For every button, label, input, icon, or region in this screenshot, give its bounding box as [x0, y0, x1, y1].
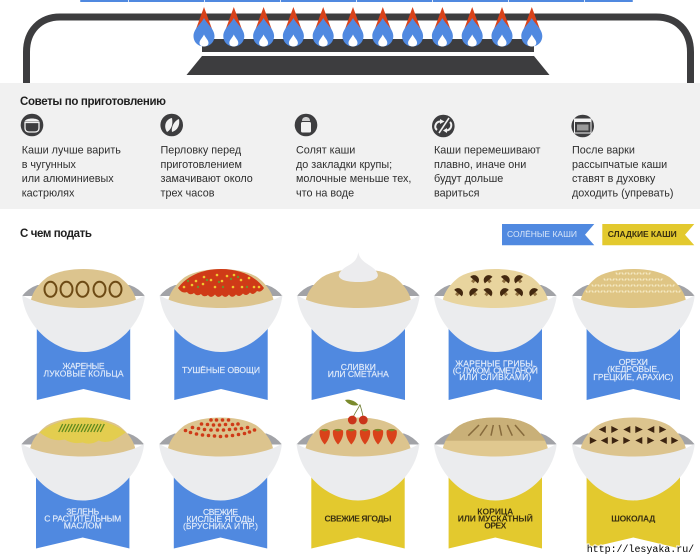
burner	[186, 39, 550, 75]
legend: salty porridge: СОЛЁНЫЕ КАШИ	[507, 229, 577, 239]
strawberries	[320, 429, 397, 444]
label: КИСЛЫЕ ЯГОДЫ	[186, 514, 254, 524]
bowl: fried mushrooms	[434, 269, 557, 400]
vegetable bits	[183, 274, 260, 288]
nuts	[585, 271, 681, 295]
label: ШОКОЛАД	[611, 514, 655, 524]
tip 4 text: будут дольше	[434, 173, 503, 185]
label: СЛИВКИ	[341, 362, 376, 372]
bowl: cream or sour cream	[297, 252, 420, 400]
bowl: chocolate	[572, 418, 695, 548]
bowl: nuts	[572, 269, 695, 400]
pot bottom edge	[80, 0, 633, 2]
label: ИЛИ СМЕТАНА	[328, 369, 389, 379]
tip 3 text: Солят каши	[296, 144, 355, 156]
label: ГРЕЦКИЕ, АРАХИС)	[593, 372, 673, 382]
tip 2 text: приготовлением	[160, 159, 242, 171]
label: (БРУСНИКА И ПР.)	[183, 521, 258, 531]
tip 1 text: или алюминиевых	[22, 173, 114, 185]
legend: sweet porridge: СЛАДКИЕ КАШИ	[608, 229, 677, 239]
tip 1 text: в чугунных	[22, 159, 76, 171]
legend: salty porridge	[502, 224, 594, 245]
label: ОРЕХИ	[619, 357, 648, 367]
tip 4 text: вариться	[434, 188, 480, 200]
legend: sweet porridge	[602, 224, 694, 245]
tip 2 text: трех часов	[160, 188, 215, 200]
label: КОРИЦА	[477, 506, 513, 516]
label: СВЕЖИЕ ЯГОДЫ	[324, 514, 392, 524]
cinnamon crust	[445, 418, 545, 441]
bowl: fried onion rings	[22, 269, 145, 400]
tip 5 text: ставят в духовку	[572, 173, 656, 185]
icon: pot	[21, 114, 43, 136]
tip 5 text: После варки	[572, 144, 635, 156]
vegetable sauce	[178, 269, 264, 297]
label: ЛУКОВЫЕ КОЛЬЦА	[44, 368, 124, 378]
flames	[194, 7, 542, 46]
tip 4 text: плавно, иначе они	[434, 159, 526, 171]
tip 3 text: молочные меньше тех,	[296, 173, 411, 185]
stove frame	[26, 17, 690, 83]
icon: oven	[571, 115, 594, 137]
tip 1 text: кастрюлях	[22, 188, 75, 200]
label: ИЛИ МУСКАТНЫЙ	[458, 512, 533, 524]
bowl: stewed vegetables	[160, 269, 282, 400]
onion rings	[44, 282, 122, 297]
icon: salt shaker	[295, 114, 317, 136]
tip 1 text: Каши лучше варить	[22, 144, 121, 156]
label: ЖАРЕНЫЕ	[62, 361, 105, 371]
tip 3 text: до закладки крупы;	[296, 159, 392, 171]
tip 5 text: доходить (упревать)	[572, 188, 674, 200]
mushrooms	[452, 273, 540, 298]
tip 2 text: Перловку перед	[160, 144, 242, 156]
label: ИЛИ СЛИВКАМИ)	[459, 372, 531, 382]
bowl: fresh sour berries	[159, 418, 282, 548]
label: СВЕЖИЕ	[203, 507, 238, 517]
heading: cooking tips: Советы по приготовлению	[20, 96, 166, 108]
tip 2 text: замачивают около	[160, 173, 253, 185]
label: С РАСТИТЕЛЬНЫМ	[44, 514, 121, 524]
label: ЗЕЛЕНЬ	[66, 506, 100, 516]
berries	[184, 418, 256, 438]
label: ЖАРЕНЫЕ ГРИБЫ,	[455, 358, 535, 368]
cherries	[345, 400, 368, 424]
chocolate pieces	[590, 426, 678, 444]
tip 5 text: рассыпчатые каши	[572, 159, 667, 171]
label: (КЕДРОВЫЕ,	[607, 364, 659, 374]
label: ОРЕХ	[484, 520, 507, 530]
heading: what to serve with: С чем подать	[20, 228, 92, 240]
label: (С ЛУКОМ, СМЕТАНОЙ	[453, 364, 538, 375]
panel: cooking tips	[0, 83, 700, 209]
bowl: herbs with vegetable oil	[21, 418, 144, 548]
tip 3 text: что на воде	[296, 188, 354, 200]
cream dollop	[339, 252, 378, 282]
label: ТУШЁНЫЕ ОВОЩИ	[182, 365, 260, 375]
label: МАСЛОМ	[64, 520, 102, 530]
icon: stirring arrows	[432, 115, 455, 137]
icon: grains	[160, 114, 183, 136]
tip 4 text: Каши перемешивают	[434, 144, 540, 156]
bowl: fresh berries	[296, 400, 420, 548]
oil and herbs	[40, 418, 126, 444]
watermark: http://lesyaka.ru/	[587, 544, 694, 556]
bowl: cinnamon or nutmeg	[434, 418, 557, 548]
